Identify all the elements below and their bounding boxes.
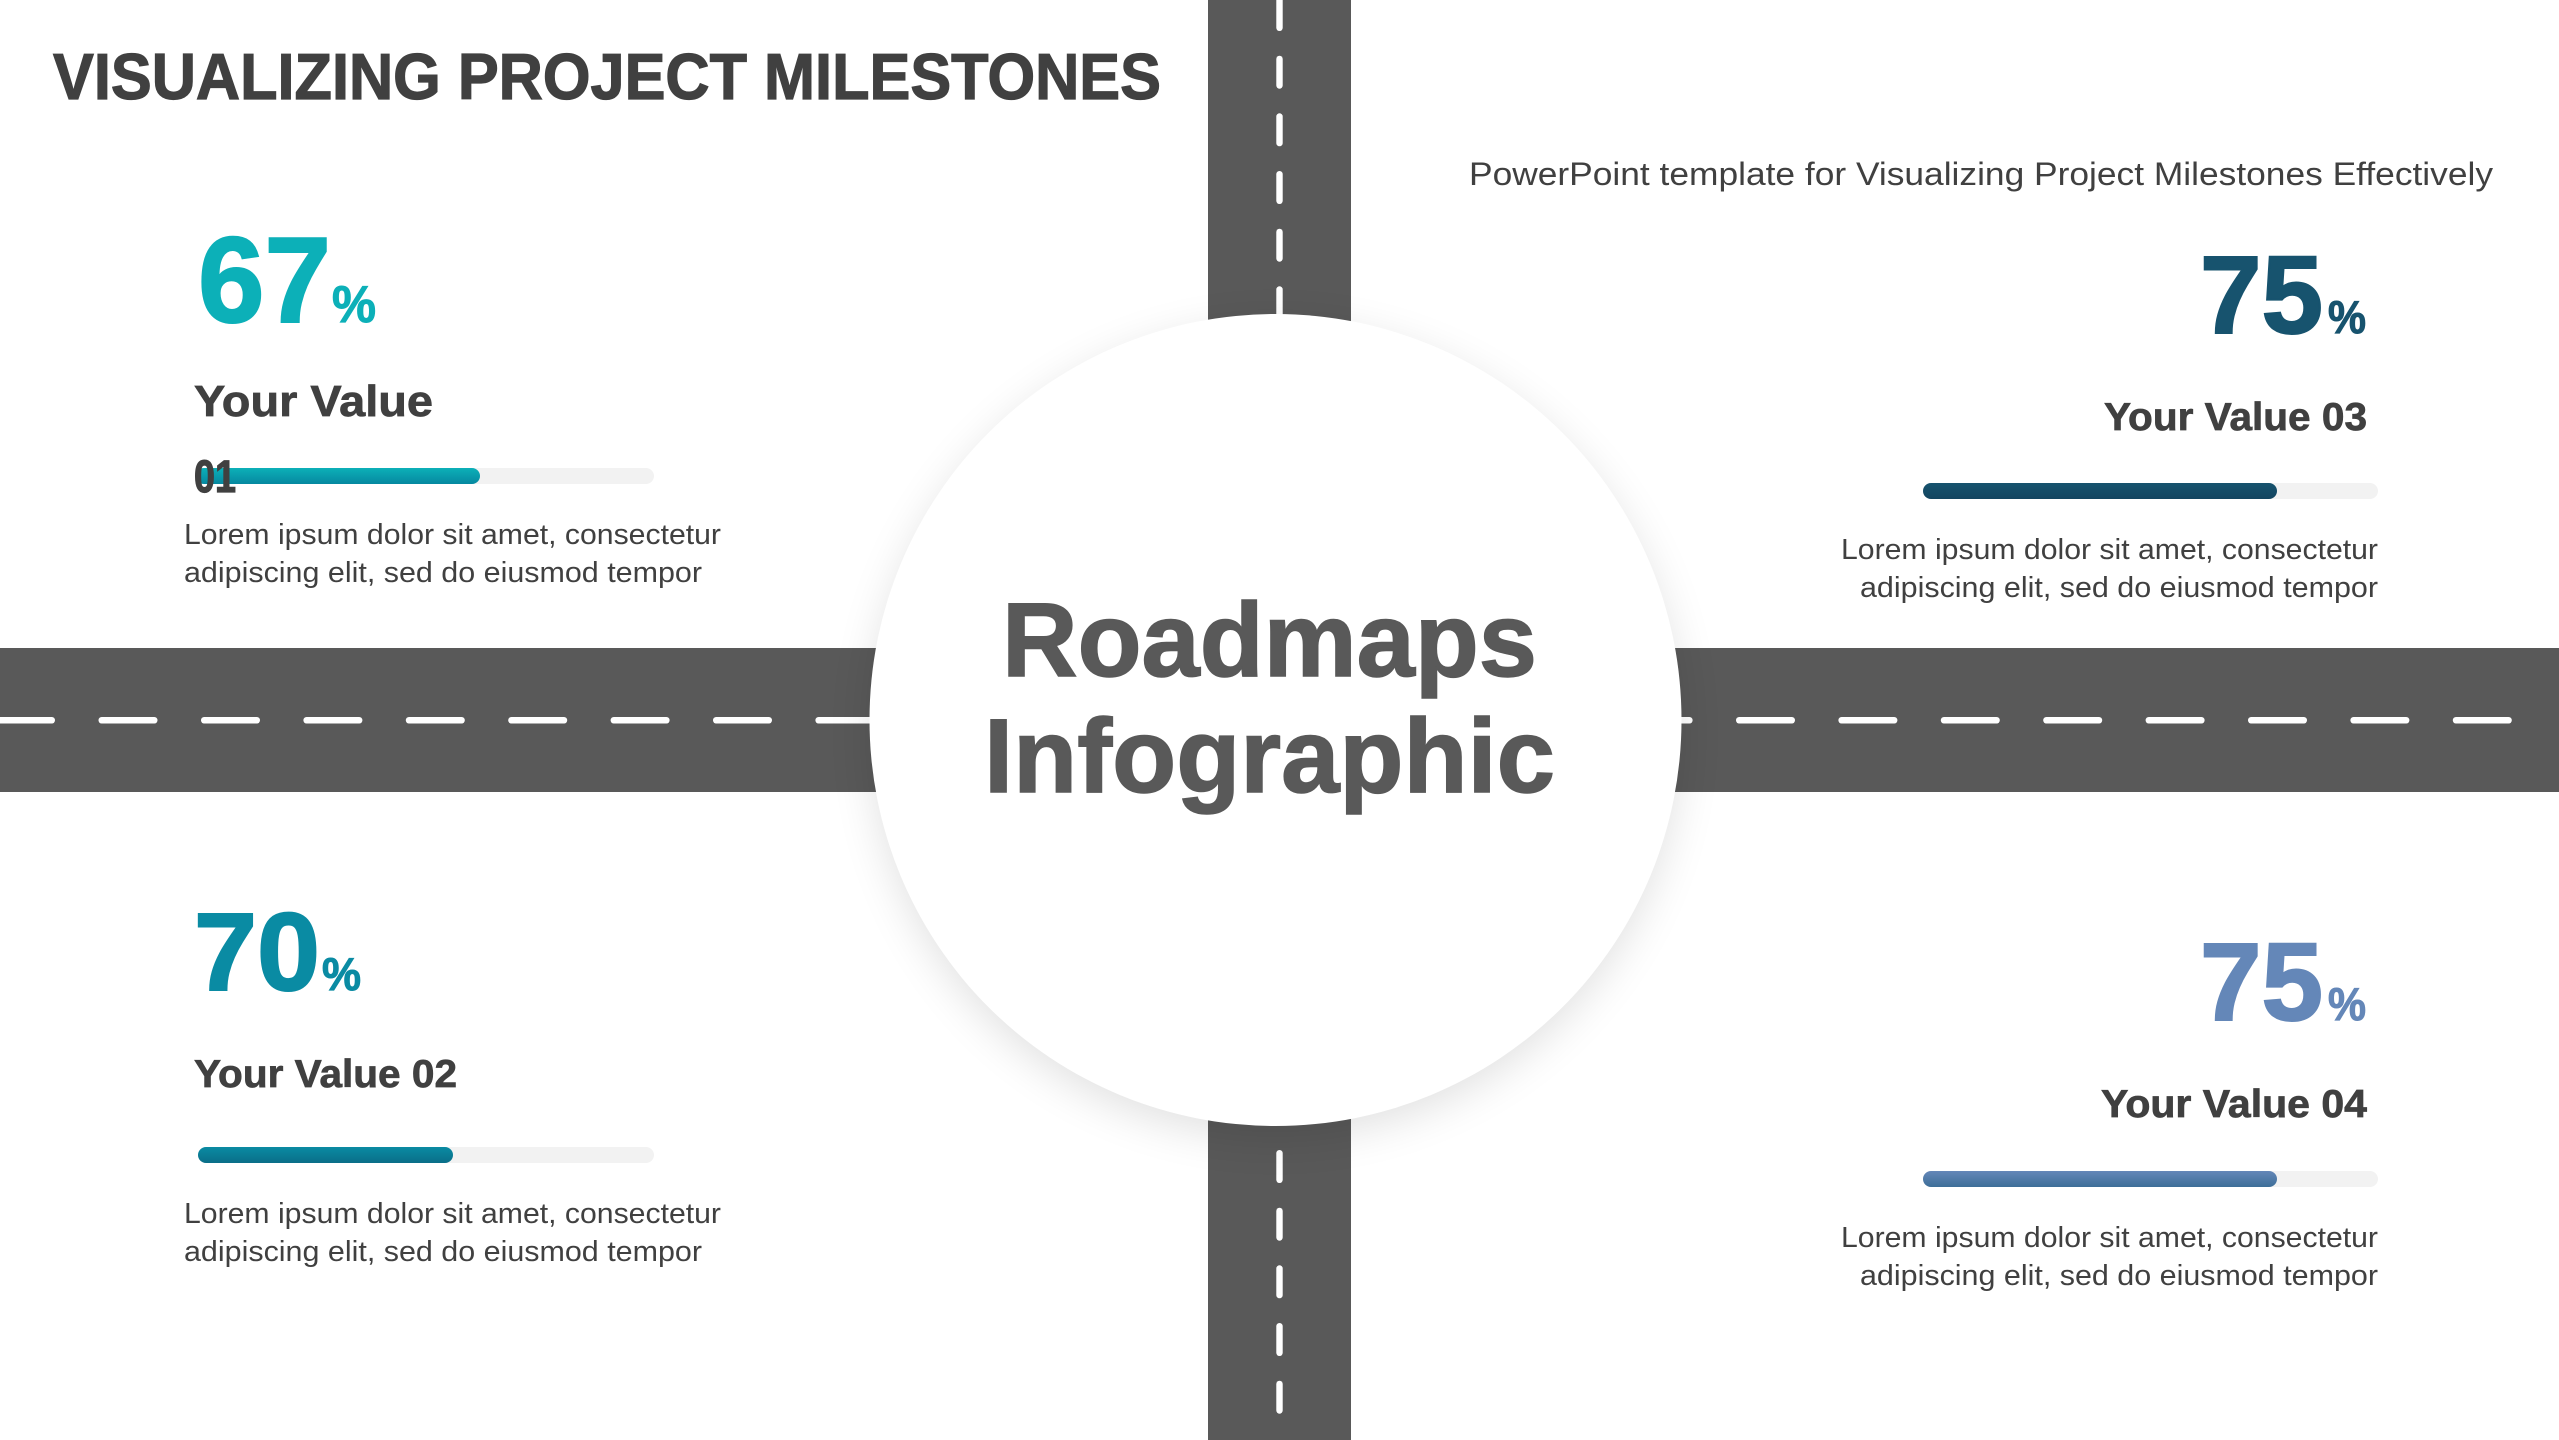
- description: Lorem ipsum dolor sit amet, consectetur: [184, 1198, 721, 1230]
- label: Your Value 03: [2104, 396, 2367, 439]
- vertical road: [1208, 0, 1351, 1440]
- panel: value 03: [1841, 234, 2378, 604]
- progress bar: [196, 468, 654, 484]
- label: Your Value 02: [194, 1053, 457, 1096]
- description: adipiscing elit, sed do eiusmod tempor: [184, 1236, 702, 1268]
- description: Lorem ipsum dolor sit amet, consectetur: [184, 519, 721, 551]
- stat 67%: 67: [198, 212, 331, 348]
- progress bar: [1923, 483, 2378, 499]
- center heading: Roadmaps: [1002, 582, 1537, 699]
- center circle: [870, 314, 1682, 1136]
- description: adipiscing elit, sed do eiusmod tempor: [1860, 1260, 2378, 1292]
- number 01: 01: [194, 451, 236, 502]
- center heading: Infographic: [984, 698, 1555, 815]
- description: [184, 519, 721, 589]
- description: [1841, 1222, 2378, 1292]
- stat 75%: 75: [2200, 234, 2323, 357]
- label: Your Value: [194, 377, 433, 426]
- description: adipiscing elit, sed do eiusmod tempor: [1860, 572, 2378, 604]
- stat 75%: %: [2328, 978, 2366, 1030]
- panel: value 04: [1841, 921, 2378, 1292]
- stat 67%: %: [332, 276, 376, 334]
- stat 75%: %: [2328, 291, 2366, 343]
- description: Lorem ipsum dolor sit amet, consectetur: [1841, 1222, 2378, 1254]
- progress bar: [198, 1147, 654, 1163]
- horizontal road: [0, 648, 2559, 792]
- panel: value 01: [184, 212, 721, 589]
- center heading: [984, 582, 1555, 815]
- stat 75%: 75: [2200, 921, 2323, 1044]
- label: Your Value 04: [2101, 1083, 2367, 1126]
- description: Lorem ipsum dolor sit amet, consectetur: [1841, 534, 2378, 566]
- title: VISUALIZING PROJECT MILESTONES: [53, 40, 1161, 113]
- panel: value 02: [184, 891, 721, 1268]
- progress bar: [1923, 1171, 2378, 1187]
- stat 70%: %: [322, 948, 361, 1000]
- description: [1841, 534, 2378, 604]
- description: adipiscing elit, sed do eiusmod tempor: [184, 557, 702, 589]
- subtitle: PowerPoint template for Visualizing Project Milestones Effectively: [1469, 156, 2493, 192]
- stat 70%: 70: [194, 891, 320, 1014]
- description: [184, 1198, 721, 1268]
